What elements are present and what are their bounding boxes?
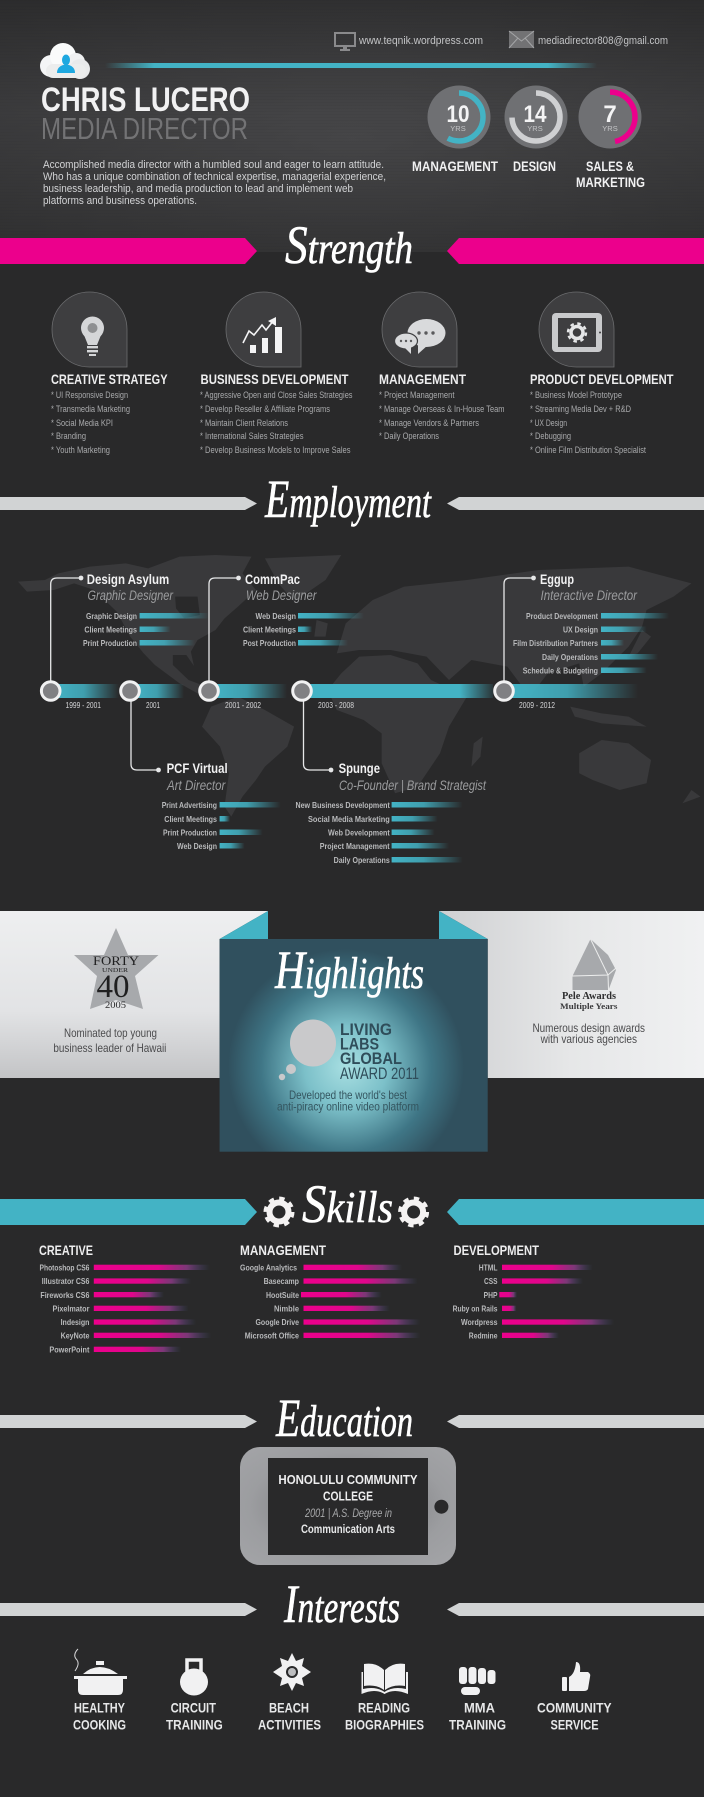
stat labels: MANAGEMENT (412, 158, 498, 174)
card: business development: * Aggressive Open and Close Sales Strategies (200, 390, 353, 400)
section banner: strength: Strength (285, 215, 413, 275)
card: management: * Daily Operations (379, 431, 439, 441)
job: eggup: Interactive Director (540, 587, 638, 603)
icon: cooking pot (74, 1649, 127, 1695)
job: eggup: Schedule & Budgeting (523, 666, 598, 676)
job: spunge: New Business Development (296, 800, 390, 810)
job: pcf virtual: Web Design (177, 841, 217, 851)
interest: reading biographies: READING (358, 1700, 410, 1716)
card: product development: * Online Film Distribution Specialist (530, 445, 646, 455)
interest: circuit training (166, 1660, 223, 1732)
job: eggup: Film Distribution Partners (513, 638, 598, 648)
summary paragraph: platforms and business operations. (43, 195, 197, 207)
stat: design 14 years: 14 (524, 101, 547, 128)
card: creative strategy: * UI Responsive Design (51, 390, 128, 400)
card: business development: * Develop Business Models to Improve Sales (200, 445, 351, 455)
connector dots (79, 576, 536, 772)
icon: monitor (335, 33, 355, 51)
skills: development: Wordpress (461, 1317, 498, 1327)
job: commpac: Client Meetings (243, 624, 296, 634)
skills: development: PHP (484, 1290, 498, 1300)
card: creative strategy: CREATIVE STRATEGY (51, 371, 168, 387)
skills: creative: CREATIVE (39, 1242, 93, 1258)
stat labels (412, 158, 645, 190)
interest: circuit training: CIRCUIT (171, 1700, 216, 1716)
icon: light bulb (81, 316, 104, 356)
section banner: education (0, 1388, 704, 1448)
panel: highlights centre: Highlights (274, 940, 424, 1000)
panel: strength cards (51, 292, 674, 455)
job: pcf virtual: Print Production (163, 828, 217, 838)
card: creative strategy (51, 292, 168, 455)
caption: pele award (532, 1021, 645, 1046)
award name: LABS (340, 1036, 379, 1054)
skills: creative: Photoshop CS6 (40, 1262, 90, 1272)
card: creative strategy: * Branding (51, 431, 86, 441)
job: design asylum: Client Meetings (84, 624, 137, 634)
year labels: 2009 - 2012 (519, 700, 555, 710)
interest: healthy cooking: COOKING (73, 1716, 126, 1732)
year labels: 2001 (146, 700, 160, 710)
card: product development: * Debugging (530, 431, 571, 441)
card: business development: * Maintain Client Relations (200, 418, 288, 428)
panel: education tablet: COLLEGE (323, 1489, 373, 1504)
job: spunge: Daily Operations (334, 855, 390, 865)
email: mediadirector808@gmail.com (538, 35, 668, 47)
skills: development: DEVELOPMENT (454, 1242, 539, 1258)
icon: open book (362, 1664, 408, 1694)
section banner: interests (0, 1574, 704, 1634)
job: design asylum: Graphic Designer (88, 587, 174, 603)
card: business development (200, 292, 353, 455)
skills: creative: Illustrator CS6 (42, 1276, 90, 1286)
panel: education tablet: 2001 | A.S. Degree in (304, 1506, 392, 1520)
interest: mma training (449, 1667, 506, 1732)
connector lines (51, 578, 533, 770)
job: spunge (296, 760, 487, 865)
caption: forty under 40 (53, 1026, 166, 1055)
interest: mma training: TRAINING (449, 1716, 506, 1732)
icon: tablet with gear (552, 313, 602, 352)
panel: highlights centre (220, 939, 488, 1152)
panel: education tablet (240, 1447, 456, 1565)
icon: sun (273, 1653, 311, 1691)
stat: sales 7 years: YRS (602, 124, 618, 133)
icon: fist (459, 1667, 496, 1695)
job: eggup (513, 571, 669, 676)
skills: creative: Indesign (61, 1317, 89, 1327)
card: management: * Project Management (379, 390, 455, 400)
icon: forty under 40 star: FORTY (93, 953, 140, 968)
section banner: strength (0, 215, 704, 275)
card: product development: * Business Model Prototype (530, 390, 622, 400)
job: spunge: Social Media Marketing (308, 814, 390, 824)
card: management: * Manage Overseas & In-House Team (379, 404, 504, 414)
icon: forty under 40 star: UNDER (102, 967, 129, 974)
caption: pele award: Numerous design awards (532, 1021, 645, 1035)
ribbon folds (220, 911, 488, 939)
icon: forty under 40 star: 40 (96, 969, 130, 1005)
award name (340, 1021, 419, 1083)
website: www.teqnik.wordpress.com (358, 35, 483, 47)
skills: creative: Pixelmator (52, 1304, 90, 1314)
card: management: MANAGEMENT (379, 371, 466, 387)
skills: management: Google Drive (256, 1317, 299, 1327)
card: business development: * International Sales Strategies (200, 431, 304, 441)
skills: management: Microsoft Office (245, 1330, 299, 1340)
card: product development (530, 292, 674, 455)
job: eggup: UX Design (563, 624, 598, 634)
interest: community service: COMMUNITY (537, 1700, 612, 1716)
award caption: Developed the world's best (289, 1088, 408, 1102)
card: creative strategy: * Social Media KPI (51, 418, 113, 428)
interest: mma training: MMA (464, 1700, 495, 1716)
interest: healthy cooking (73, 1649, 127, 1732)
summary paragraph: Accomplished media director with a humbled soul and eager to learn attitude. (43, 159, 384, 171)
caption: pele award: with various agencies (540, 1032, 637, 1046)
panel: interests (73, 1649, 612, 1732)
timeline (41, 576, 638, 772)
stat: design 14 years (504, 86, 568, 148)
job: spunge: Web Development (328, 828, 390, 838)
summary paragraph: business leadership, and media production to lead and implement web (43, 183, 353, 195)
interest: reading biographies (345, 1664, 424, 1732)
interest: beach activities (258, 1653, 321, 1732)
job: commpac: Post Production (243, 638, 296, 648)
section banner: employment (0, 469, 704, 529)
skills: development: HTML (479, 1262, 498, 1272)
section banner: skills (0, 1174, 704, 1234)
year labels (66, 700, 555, 710)
icon: pele award (560, 939, 617, 1011)
icon: speech bubbles (394, 319, 446, 354)
job: eggup: Eggup (540, 571, 574, 587)
job: design asylum: Print Production (83, 638, 137, 648)
skills: management (240, 1242, 420, 1340)
interest: community service: SERVICE (550, 1716, 599, 1732)
job title: MEDIA DIRECTOR (41, 111, 248, 146)
icon: kettlebell (180, 1660, 208, 1696)
teal divider line (105, 63, 597, 68)
skills: creative: KeyNote (61, 1330, 90, 1340)
stat labels: DESIGN (513, 158, 556, 174)
caption: forty under 40: business leader of Hawaii (53, 1041, 166, 1055)
stat: management 10 years (428, 86, 490, 148)
interest: community service (537, 1662, 612, 1732)
skills: management: MANAGEMENT (240, 1242, 326, 1258)
interest: circuit training: TRAINING (166, 1716, 223, 1732)
panel: header (0, 0, 704, 252)
job: pcf virtual: Client Meetings (164, 814, 217, 824)
job: pcf virtual: PCF Virtual (167, 760, 228, 776)
summary paragraph: Who has a unique combination of technical expertise, managerial experience, (43, 171, 386, 183)
section banner: skills: Skills (302, 1174, 393, 1234)
card: product development: * UX Design (530, 418, 567, 428)
skills: creative: PowerPoint (49, 1344, 90, 1354)
card: creative strategy: * Transmedia Marketing (51, 404, 130, 414)
job: eggup: Product Development (526, 611, 598, 621)
name: CHRIS LUCERO (41, 81, 250, 119)
skills: management: Basecamp (264, 1276, 299, 1286)
icon: pele award: Pele Awards (562, 991, 616, 1002)
interest: beach activities: ACTIVITIES (258, 1716, 321, 1732)
job: spunge: Co-Founder | Brand Strategist (339, 777, 487, 793)
icon: right gear (400, 1198, 427, 1226)
icon: left gear (266, 1198, 292, 1226)
job: commpac: CommPac (245, 571, 300, 587)
job: spunge: Project Management (320, 841, 390, 851)
stat labels: MARKETING (576, 174, 645, 190)
job: design asylum: Design Asylum (87, 571, 169, 587)
interest: healthy cooking: HEALTHY (74, 1700, 126, 1716)
year labels: 1999 - 2001 (66, 700, 101, 710)
job: commpac: Web Design (256, 611, 296, 621)
skills: management: Google Analytics (240, 1262, 297, 1272)
icon: forty under 40 star (74, 928, 158, 1011)
job: commpac: Web Designer (246, 587, 318, 603)
panel: education tablet: Communication Arts (301, 1522, 395, 1536)
icon: growth chart (243, 317, 282, 353)
icon: thumbs up (562, 1662, 590, 1691)
panel: highlights right band (439, 911, 704, 1078)
job: design asylum: Graphic Design (86, 611, 137, 621)
timeline nodes (41, 682, 513, 700)
stat: management 10 years: 10 (446, 101, 470, 128)
award name: AWARD 2011 (340, 1065, 419, 1083)
year labels: 2003 - 2008 (318, 700, 354, 710)
skills: development (453, 1242, 614, 1340)
section banner: employment: Employment (264, 469, 432, 529)
icon: thought bubble (279, 1020, 336, 1080)
world map background (18, 555, 700, 817)
skills: development: CSS (484, 1276, 498, 1286)
timeline bars (55, 684, 638, 698)
job: pcf virtual (162, 760, 281, 851)
icon: envelope (509, 31, 534, 48)
skills: development: Redmine (469, 1330, 498, 1340)
skills: creative (39, 1242, 211, 1354)
summary paragraph (43, 159, 386, 207)
card: management (379, 292, 504, 441)
skills: creative: Fireworks CS6 (40, 1290, 90, 1300)
job: pcf virtual: Print Advertising (162, 800, 217, 810)
stat labels: SALES & (586, 158, 634, 174)
stat: management 10 years: YRS (450, 124, 466, 133)
interest: beach activities: BEACH (269, 1700, 309, 1716)
award name: GLOBAL (340, 1050, 402, 1068)
panel: highlights left band (0, 911, 268, 1078)
section banner: interests: Interests (283, 1574, 400, 1634)
card: management: * Manage Vendors & Partners (379, 418, 479, 428)
interest: reading biographies: BIOGRAPHIES (345, 1716, 424, 1732)
job: pcf virtual: Art Director (166, 777, 226, 793)
stat: design 14 years: YRS (527, 124, 543, 133)
job: spunge: Spunge (339, 760, 380, 776)
skills: management: HootSuite (266, 1290, 299, 1300)
award name: LIVING (340, 1021, 392, 1039)
section banner: education: Education (275, 1388, 413, 1448)
stat: sales 7 years: 7 (603, 101, 617, 128)
card: business development: * Develop Reseller & Affiliate Programs (200, 404, 330, 414)
award caption: anti-piracy online video platform (277, 1100, 419, 1114)
card: product development: * Streaming Media Dev + R&D (530, 404, 631, 414)
card: business development: BUSINESS DEVELOPMENT (200, 371, 349, 387)
job: commpac (243, 571, 364, 648)
icon: cloud avatar (40, 43, 90, 79)
card: creative strategy: * Youth Marketing (51, 445, 110, 455)
stat: sales 7 years (578, 86, 642, 148)
job: eggup: Daily Operations (542, 652, 598, 662)
award caption (277, 1088, 419, 1114)
icon: pele award: Multiple Years (560, 1002, 617, 1011)
skills: development: Ruby on Rails (453, 1304, 498, 1314)
job: design asylum (83, 571, 209, 648)
year labels: 2001 - 2002 (225, 700, 261, 710)
caption: forty under 40: Nominated top young (64, 1026, 157, 1040)
panel: education tablet: HONOLULU COMMUNITY (278, 1472, 418, 1487)
skills: management: Nimble (274, 1304, 299, 1314)
icon: forty under 40 star: 2005 (105, 1001, 126, 1011)
